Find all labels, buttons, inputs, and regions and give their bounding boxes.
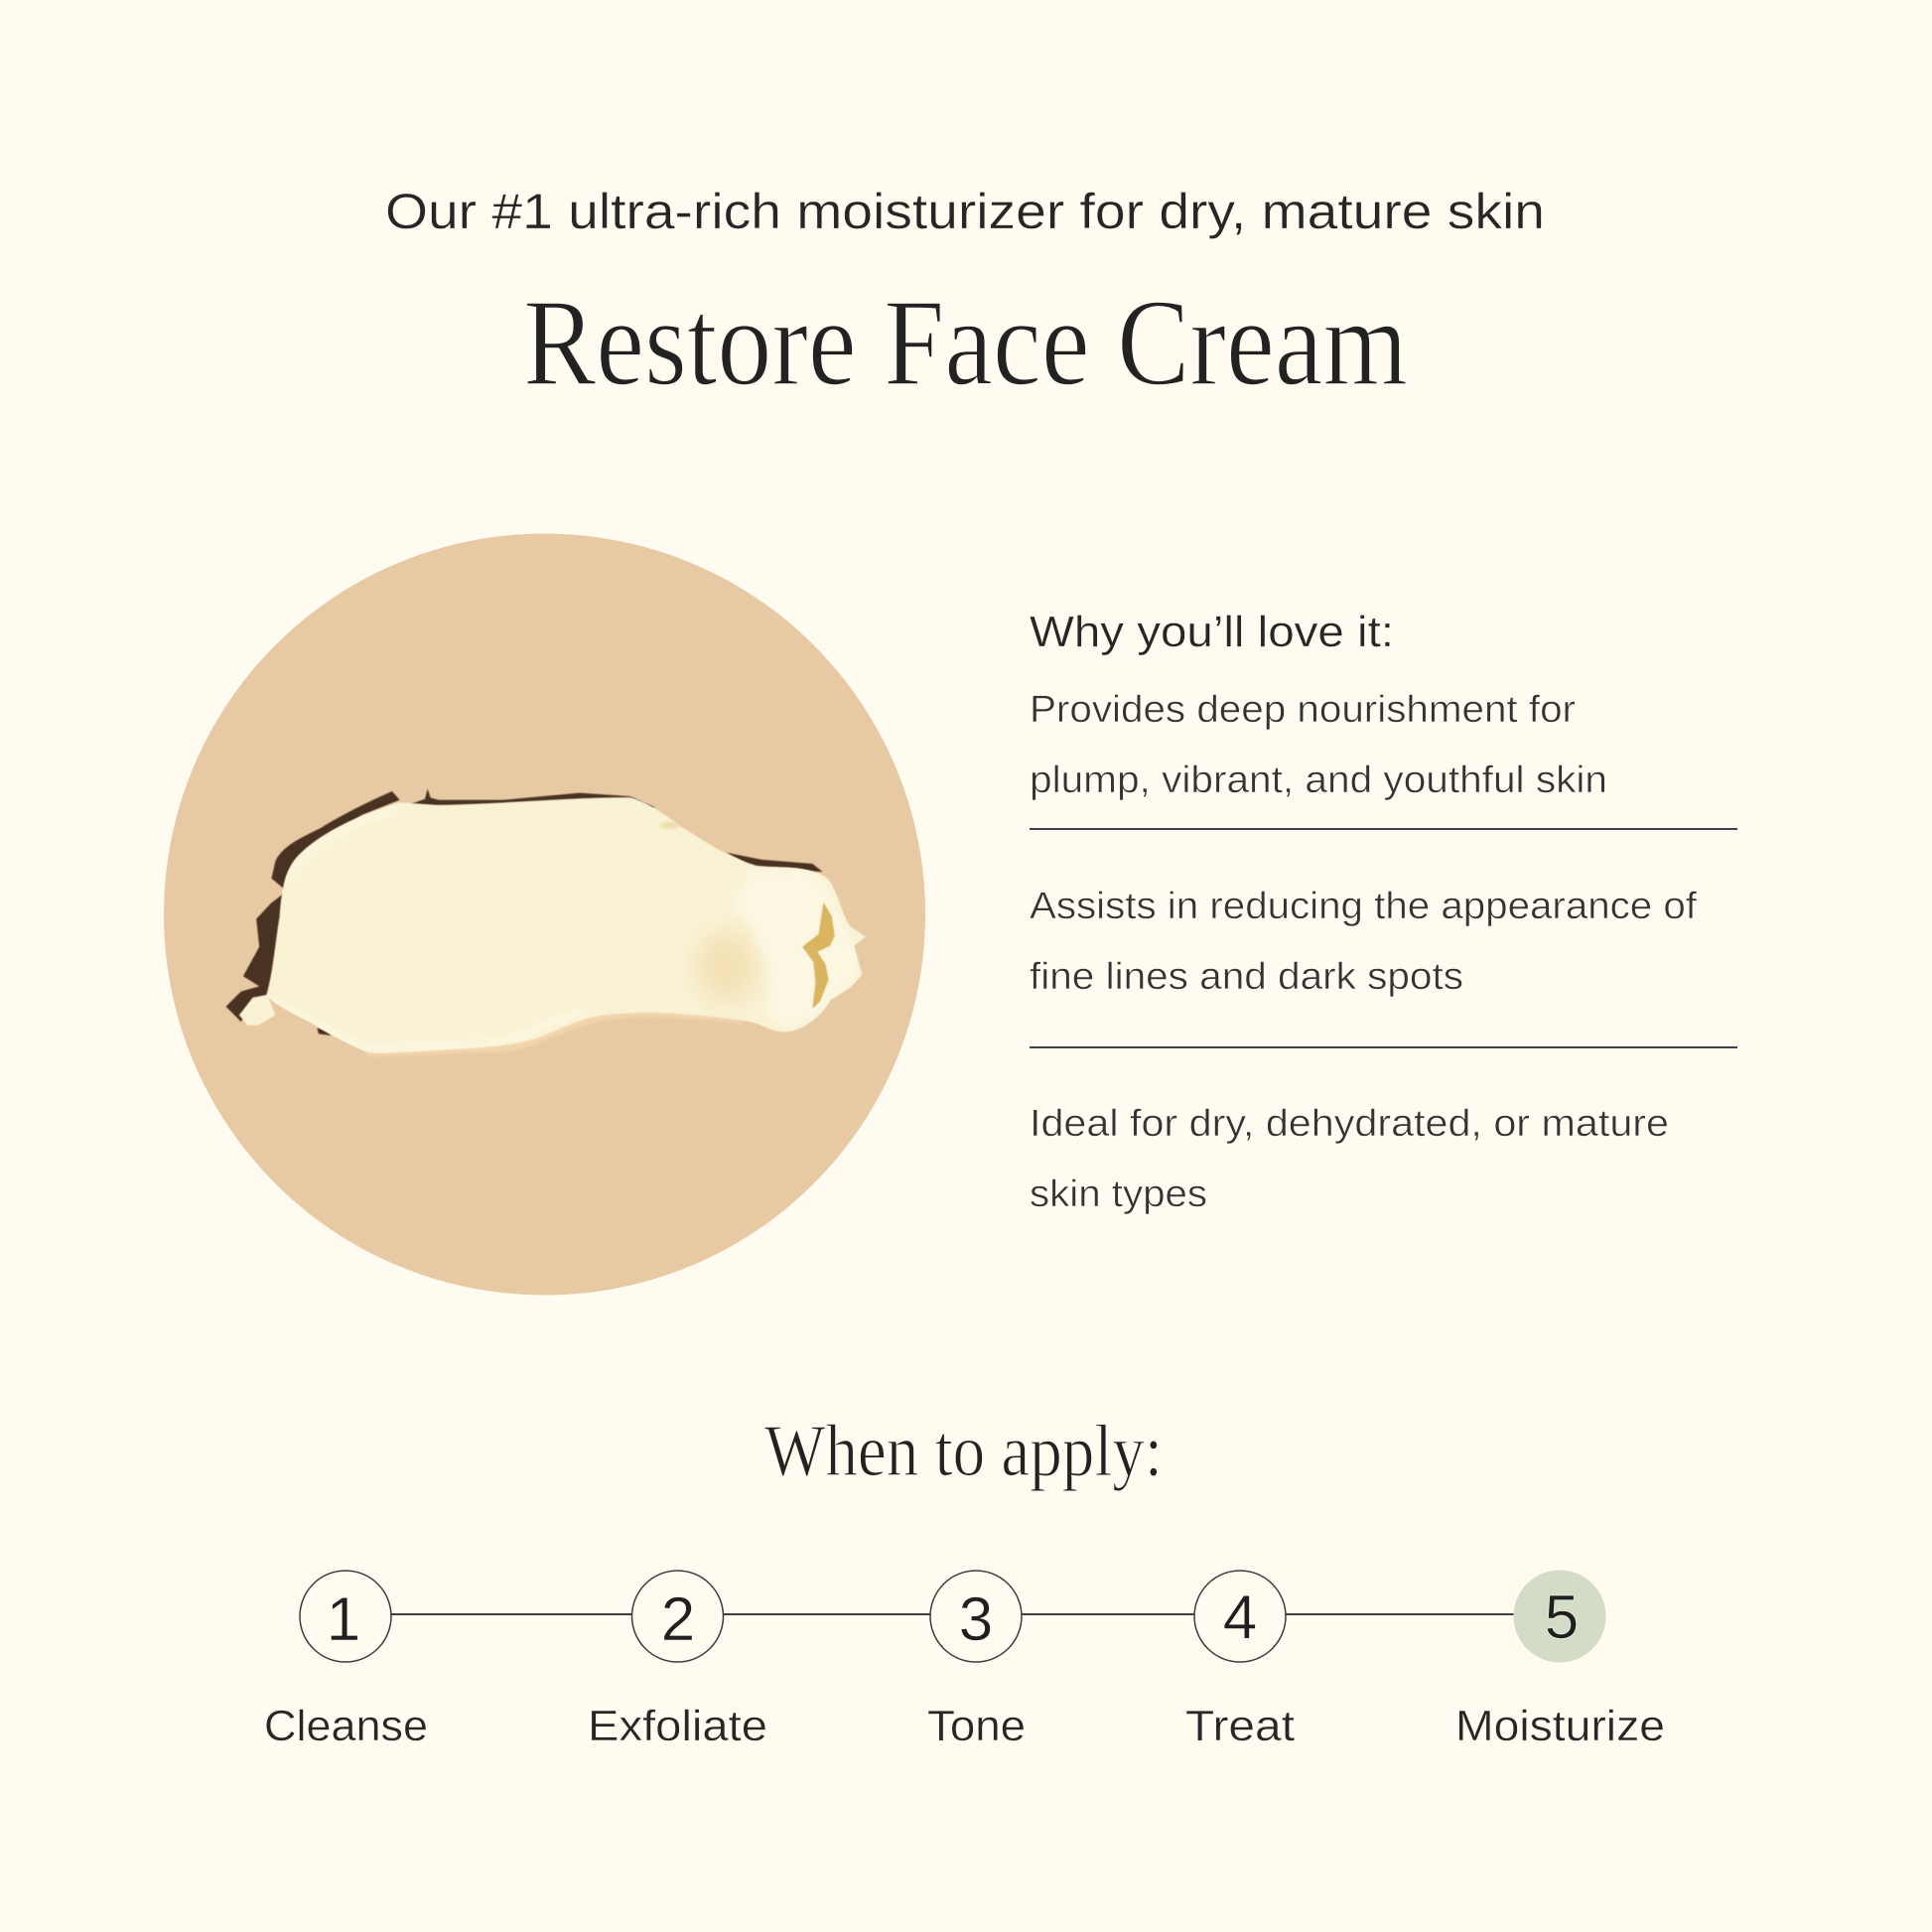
swatch shading: [270, 809, 858, 1048]
swatch body: [239, 797, 866, 1053]
warm tint: [696, 931, 757, 1003]
peach circle: [164, 534, 925, 1295]
step 2: exfoliate: 2: [661, 1586, 695, 1654]
heading: Why you’ll love it:: [1030, 608, 1394, 656]
bright rim on left: [284, 812, 373, 884]
benefit 3: skin types: [1030, 1173, 1207, 1215]
step 5: moisturize: [1455, 1571, 1665, 1750]
bright rim at bottom: [272, 1000, 506, 1052]
small ochre mark near top: [659, 822, 682, 829]
benefit 2: fine lines and dark spots: [1030, 956, 1463, 998]
step 4: treat: 4: [1223, 1584, 1257, 1652]
step 3: tone: Tone: [927, 1702, 1026, 1750]
step 1: cleanse: [264, 1571, 428, 1750]
benefit 3: [1030, 1103, 1669, 1215]
swatch dark shadow: [226, 788, 823, 1035]
benefit 1: plump, vibrant, and youthful skin: [1030, 759, 1607, 801]
panel: routine steps timeline: [264, 1571, 1665, 1750]
step 2: exfoliate: Exfoliate: [588, 1702, 767, 1750]
step 5: moisturize: 5: [1545, 1584, 1579, 1652]
title: Restore Face Cream: [523, 275, 1408, 412]
benefit 3: Ideal for dry, dehydrated, or mature: [1030, 1103, 1669, 1145]
pale right end: [732, 869, 858, 1028]
cream swatch: [226, 788, 866, 1056]
benefit 1: Provides deep nourishment for: [1030, 689, 1576, 731]
benefit 2: Assists in reducing the appearance of: [1030, 886, 1697, 927]
benefit 1: [1030, 689, 1607, 801]
step 3: tone: [927, 1571, 1026, 1750]
swatch soft highlight along bottom edge: [366, 1003, 742, 1056]
heading: when to apply: When to apply:: [764, 1411, 1163, 1492]
step 4: treat: Treat: [1185, 1702, 1295, 1750]
step 3: tone: 3: [959, 1586, 993, 1654]
step 4: treat: [1185, 1571, 1295, 1750]
step 1: cleanse: 1: [327, 1586, 360, 1654]
step 1: cleanse: Cleanse: [264, 1702, 428, 1750]
panel: why you'll love it: [1030, 608, 1737, 1215]
panel: product image circle with cream swatch: [164, 534, 925, 1295]
benefit 2: [1030, 886, 1697, 998]
subtitle: Our #1 ultra-rich moisturizer for dry, mature skin: [385, 184, 1545, 239]
step 2: exfoliate: [588, 1571, 767, 1750]
ochre crease: [802, 902, 835, 1009]
step 5: moisturize: Moisturize: [1455, 1702, 1665, 1750]
